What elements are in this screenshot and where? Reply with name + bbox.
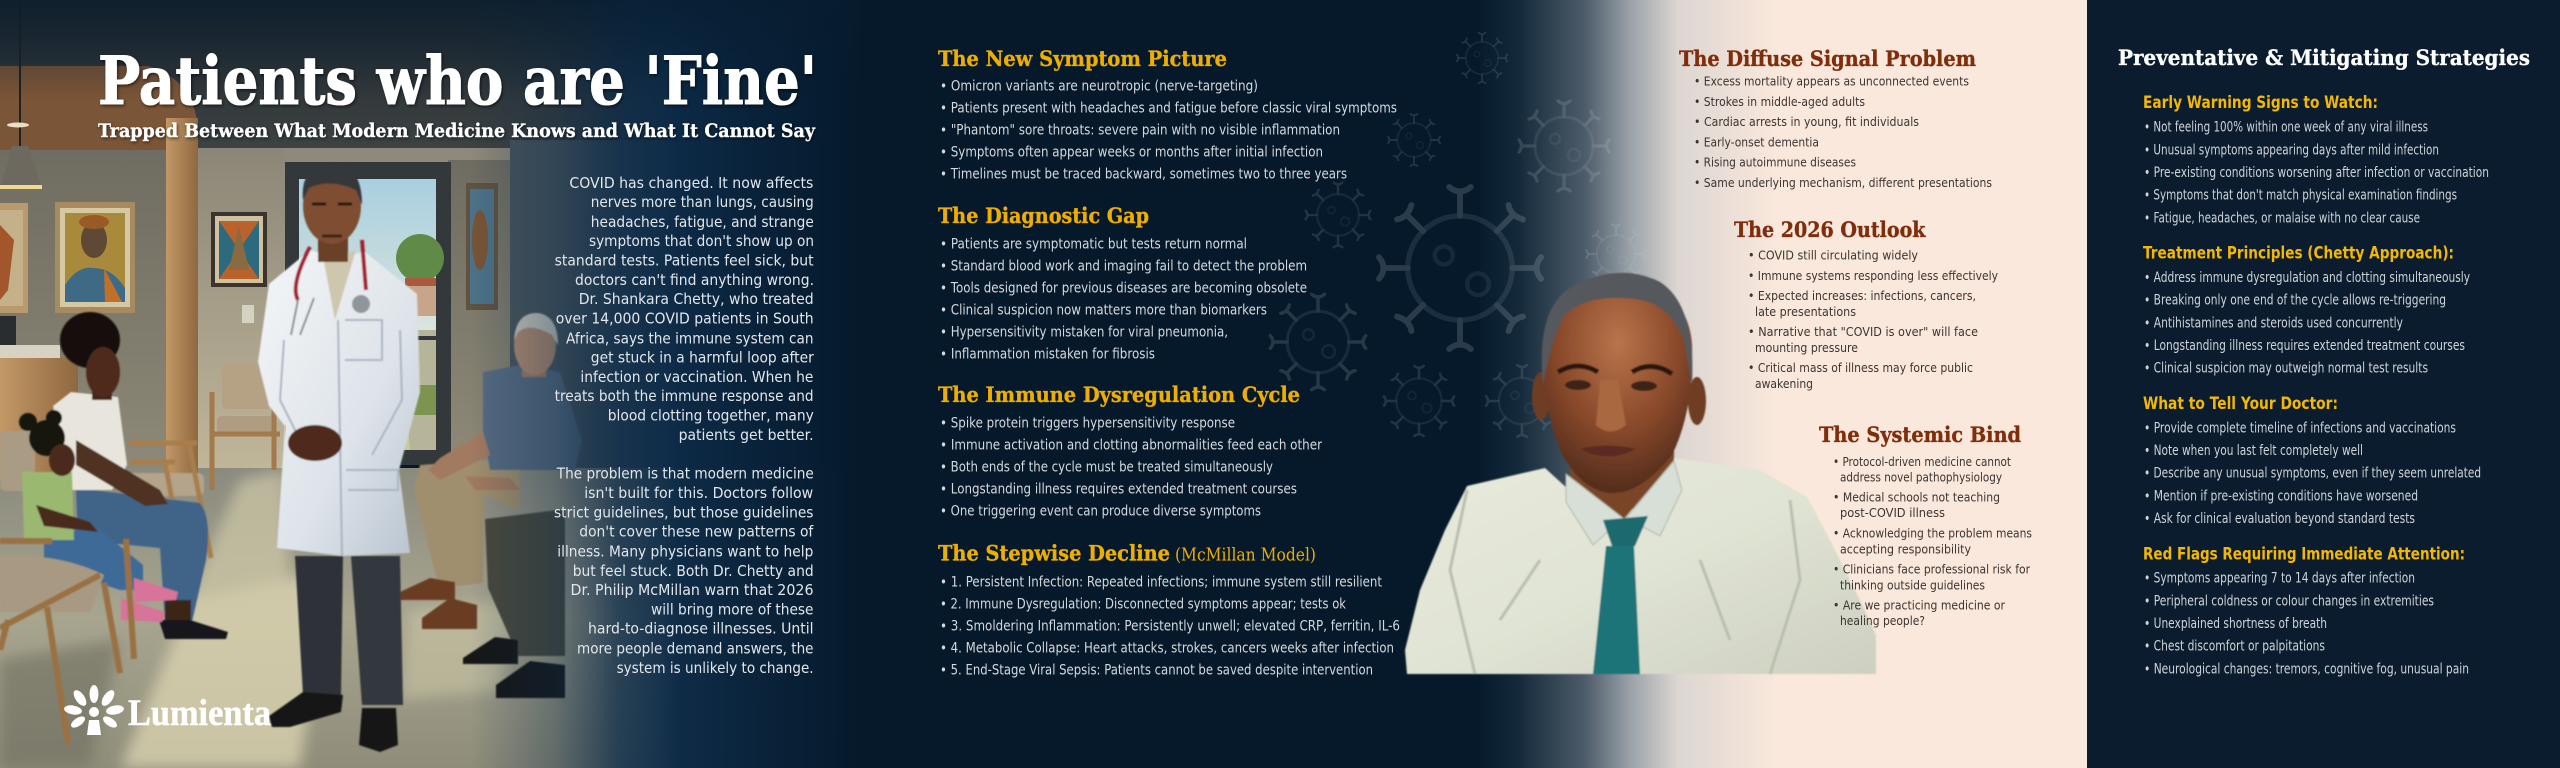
panel: middle column text: [938, 46, 1400, 679]
list: systemic bind: • Are we practicing medicine or: [1833, 598, 2006, 614]
list: stepwise decline: • 3. Smoldering Inflammation: Persistently unwell; elevated CRP, ferritin, IL-6: [940, 619, 1400, 635]
list: immune dysregulation cycle: • Spike protein triggers hypersensitivity response: [940, 416, 1235, 432]
icon: flower mark: [63, 685, 125, 735]
list: diffuse signal: • Same underlying mechanism, different presentations: [1694, 176, 1992, 191]
logo wordmark: Lumienta: [128, 693, 271, 734]
text block: intro paragraph two: will bring more of these: [651, 601, 814, 619]
list: stepwise decline: • 4. Metabolic Collapse: Heart attacks, strokes, cancers weeks after infection: [940, 641, 1394, 657]
panel: waiting room illustration: [0, 0, 860, 768]
list: diagnostic gap: [940, 236, 1307, 362]
list: immune dysregulation cycle: • Both ends of the cycle must be treated simultaneously: [940, 460, 1273, 476]
ceiling: [0, 0, 636, 148]
list: 2026 outlook: late presentations: [1755, 305, 1856, 320]
reception counter: [0, 316, 78, 478]
woman: [53, 312, 228, 639]
text block: intro paragraph two: Dr. Philip McMillan warn that 2026: [570, 581, 814, 599]
list: new symptom picture: • Symptoms often appear weeks or months after initial infection: [940, 144, 1323, 160]
subheading: Red Flags: Red Flags Requiring Immediate Attention:: [2143, 544, 2465, 563]
list: diffuse signal: • Excess mortality appears as unconnected events: [1694, 75, 1969, 90]
list: what to tell your doctor: • Provide complete timeline of infections and vaccinations: [2144, 420, 2456, 436]
text block: intro paragraph one: headaches, fatigue, and strange: [591, 213, 814, 231]
list: diagnostic gap: • Hypersensitivity mistaken for viral pneumonia,: [940, 324, 1228, 340]
text block: intro paragraph two: illness. Many physicians want to help: [557, 542, 813, 560]
panel background: peach gradient: [1480, 0, 2088, 768]
list: new symptom picture: • "Phantom" sore throats: severe pain with no visible inflammation: [940, 123, 1340, 139]
list: new symptom picture: • Patients present with headaches and fatigue before classic viral symptoms: [940, 101, 1397, 117]
heading: The 2026 Outlook: The 2026 Outlook: [1734, 217, 1926, 242]
text block: intro paragraph one: treats both the immune response and: [555, 387, 814, 405]
list: diffuse signal: • Strokes in middle-aged adults: [1694, 95, 1865, 110]
doctor standing: [258, 163, 420, 752]
list: diffuse signal: [1694, 75, 1992, 191]
list: early warning signs: [2144, 120, 2489, 226]
list: early warning signs: • Fatigue, headaches, or malaise with no clear cause: [2144, 210, 2420, 226]
list: diffuse signal: • Early-onset dementia: [1694, 135, 1819, 150]
wooden soffit and column: [0, 66, 198, 480]
list: 2026 outlook: [1748, 249, 1998, 392]
list: what to tell your doctor: • Note when you last felt completely well: [2144, 443, 2363, 459]
text block: intro paragraph two: system is unlikely to change.: [617, 659, 814, 677]
list: treatment principles: • Clinical suspicion may outweigh normal test results: [2144, 361, 2428, 377]
text block: intro paragraph one: get stuck in a harmful loop after: [591, 348, 815, 366]
list: red flags: • Neurological changes: tremors, cognitive fog, unusual pain: [2144, 661, 2469, 677]
list: 2026 outlook: • COVID still circulating widely: [1748, 249, 1918, 264]
text block: intro paragraph one: doctors can't find anything wrong.: [575, 271, 814, 289]
heading: The Diagnostic Gap: The Diagnostic Gap: [938, 203, 1149, 228]
heading: Preventative & Mitigating Strategies: Preventative & Mitigating Strategies: [2118, 45, 2530, 70]
list: systemic bind: • Clinicians face professional risk for: [1833, 562, 2031, 577]
list: systemic bind: thinking outside guidelines: [1840, 578, 1985, 593]
list: red flags: • Chest discomfort or palpitations: [2144, 639, 2325, 655]
list: diagnostic gap: • Tools designed for previous diseases are becoming obsolete: [940, 280, 1307, 296]
list: stepwise decline: [940, 575, 1400, 679]
list: early warning signs: • Not feeling 100% within one week of any viral illness: [2144, 120, 2428, 136]
list: 2026 outlook: • Immune systems responding less effectively: [1748, 269, 1998, 284]
logo: Lumienta: [63, 685, 271, 735]
list: what to tell your doctor: • Mention if pre-existing conditions have worsened: [2144, 488, 2418, 504]
text block: intro paragraph one: Africa, says the immune system can: [566, 329, 814, 347]
list: systemic bind: • Acknowledging the problem means: [1833, 526, 2032, 541]
heading: The Stepwise Decline: The Stepwise Decline: [938, 541, 1170, 566]
text block: intro paragraph two: The problem is that modern medicine: [556, 464, 814, 482]
list: immune dysregulation cycle: • Longstanding illness requires extended treatment courses: [940, 482, 1297, 498]
text block: intro paragraph two: [554, 464, 814, 677]
text block: intro paragraph two: isn't built for this. Doctors follow: [584, 484, 813, 502]
list: red flags: [2144, 571, 2469, 677]
heading: The New Symptom Picture: The New Symptom Picture: [938, 46, 1227, 71]
decorative virus particles: [1270, 33, 1646, 437]
list: what to tell your doctor: [2144, 420, 2481, 527]
list: diffuse signal: • Cardiac arrests in young, fit individuals: [1694, 115, 1919, 130]
list: red flags: • Symptoms appearing 7 to 14 days after infection: [2144, 571, 2415, 587]
seated older men: [400, 313, 582, 698]
heading: subtitle: Trapped Between What Modern Medicine Knows and What It Cannot Say: [98, 120, 816, 142]
text block: intro paragraph two: don't cover these new patterns of: [579, 523, 814, 541]
list: diagnostic gap: • Inflammation mistaken for fibrosis: [940, 346, 1155, 362]
heading: The Immune Dysregulation Cycle: The Immune Dysregulation Cycle: [938, 382, 1300, 407]
list: red flags: • Peripheral coldness or colour changes in extremities: [2144, 593, 2434, 609]
list: 2026 outlook: awakening: [1755, 377, 1813, 392]
list: systemic bind: • Medical schools not teaching: [1833, 491, 2000, 506]
list: stepwise decline: • 1. Persistent Infection: Repeated infections; immune system still resilient: [940, 575, 1382, 591]
list: systemic bind: post-COVID illness: [1840, 506, 1945, 521]
panel: preventative and mitigating strategies: [2087, 0, 2560, 768]
subheading: What to Tell Your Doctor: What to Tell Your Doctor:: [2143, 394, 2338, 413]
list: new symptom picture: • Timelines must be traced backward, sometimes two to three years: [940, 166, 1347, 182]
portrait facial features: [1558, 366, 1672, 456]
navy fade overlay: [0, 0, 860, 768]
text block: intro paragraph two: more people demand answers, the: [577, 639, 814, 657]
list: early warning signs: • Unusual symptoms appearing days after mild infection: [2144, 142, 2439, 158]
list: stepwise decline: • 5. End-Stage Viral Sepsis: Patients cannot be saved despite intervention: [940, 663, 1373, 679]
text block: intro paragraph one: infection or vaccination. When he: [580, 368, 813, 386]
text block: intro paragraph two: hard-to-diagnose illnesses. Until: [588, 620, 814, 638]
list: systemic bind: accepting responsibility: [1840, 542, 1971, 558]
subheading: Early Warning Signs: Early Warning Signs to Watch:: [2143, 93, 2378, 112]
subheading: Treatment Principles: Treatment Principles (Chetty Approach):: [2143, 244, 2454, 263]
front chair: [0, 539, 134, 744]
heading: The Diffuse Signal Problem: The Diffuse Signal Problem: [1679, 46, 1976, 71]
list: 2026 outlook: • Critical mass of illness may force public: [1748, 361, 1973, 376]
heading: title: Patients who are 'Fine': [98, 42, 817, 120]
text block: intro paragraph one: patients get better.: [679, 426, 814, 444]
list: systemic bind: healing people?: [1840, 614, 1925, 629]
list: early warning signs: • Symptoms that don't match physical examination findings: [2144, 188, 2457, 204]
list: diffuse signal: • Rising autoimmune diseases: [1694, 156, 1856, 171]
heading: The Systemic Bind: The Systemic Bind: [1819, 422, 2021, 447]
panel: peach column text: [1679, 46, 2032, 629]
portrait shirt: [1405, 458, 1876, 674]
text block: intro paragraph one: over 14,000 COVID patients in South: [556, 310, 814, 328]
text block: intro paragraph one: COVID has changed. It now affects: [569, 174, 814, 192]
text block: intro paragraph one: [555, 174, 815, 444]
portrait tie: [1593, 516, 1648, 674]
portrait shirt folds: [1450, 490, 1800, 674]
door with garden view: [285, 162, 451, 465]
text block: intro paragraph one: standard tests. Patients feel sick, but: [555, 252, 814, 270]
empty chair: [212, 363, 280, 490]
list: new symptom picture: [940, 79, 1397, 182]
list: red flags: • Unexplained shortness of breath: [2144, 616, 2327, 632]
text block: intro paragraph one: Dr. Shankara Chetty, who treated: [579, 290, 814, 308]
list: treatment principles: • Breaking only one end of the cycle allows re-triggering: [2144, 293, 2446, 309]
portrait neck: [1570, 440, 1674, 520]
wall paintings: [0, 183, 498, 323]
walls and floor: [0, 140, 672, 768]
text block: intro paragraph one: symptoms that don't show up on: [589, 232, 814, 250]
woman and child on chairs: [0, 312, 228, 744]
list: diagnostic gap: • Clinical suspicion now matters more than biomarkers: [940, 302, 1267, 318]
list: treatment principles: [2144, 270, 2470, 377]
text block: intro paragraph one: nerves more than lungs, causing: [591, 193, 814, 211]
portrait: Dr. Chetty: [1405, 273, 1876, 674]
list: diagnostic gap: • Patients are symptomatic but tests return normal: [940, 236, 1247, 252]
list: immune dysregulation cycle: • Immune activation and clotting abnormalities feed each other: [940, 438, 1322, 454]
list: immune dysregulation cycle: • One triggering event can produce diverse symptoms: [940, 504, 1261, 520]
portrait hair: [1542, 273, 1692, 385]
list: systemic bind: address novel pathophysiology: [1840, 470, 2002, 485]
text block: intro paragraph two: strict guidelines, but those guidelines: [554, 504, 814, 522]
rear chairs: [0, 431, 211, 558]
portrait face: [1544, 278, 1692, 493]
list: immune dysregulation cycle: [940, 416, 1322, 520]
text block: intro paragraph one: blood clotting together, many: [608, 407, 814, 425]
list: systemic bind: • Protocol-driven medicine cannot: [1833, 455, 2011, 470]
heading: The Stepwise Decline: (McMillan Model): [1175, 545, 1316, 566]
list: stepwise decline: • 2. Immune Dysregulation: Disconnected symptoms appear; tests ok: [940, 597, 1347, 613]
panel background: [2087, 0, 2560, 768]
list: new symptom picture: • Omicron variants are neurotropic (nerve-targeting): [940, 79, 1258, 95]
child: [19, 410, 178, 622]
list: 2026 outlook: mounting pressure: [1755, 341, 1858, 356]
portrait ears: [1532, 372, 1706, 425]
heading: The Stepwise Decline: [938, 541, 1316, 566]
list: what to tell your doctor: • Ask for clinical evaluation beyond standard tests: [2144, 511, 2415, 527]
list: treatment principles: • Antihistamines and steroids used concurrently: [2144, 315, 2403, 331]
list: 2026 outlook: • Narrative that "COVID is over" will face: [1748, 325, 1978, 340]
list: 2026 outlook: • Expected increases: infections, cancers,: [1748, 289, 1976, 304]
list: diagnostic gap: • Standard blood work and imaging fail to detect the problem: [940, 258, 1307, 274]
list: treatment principles: • Longstanding illness requires extended treatment courses: [2144, 338, 2465, 354]
text block: intro paragraph two: but feel stuck. Both Dr. Chetty and: [573, 562, 814, 580]
list: systemic bind: [1833, 455, 2032, 629]
pendant lamp: [0, 40, 42, 189]
portrait collar: [1566, 461, 1682, 545]
